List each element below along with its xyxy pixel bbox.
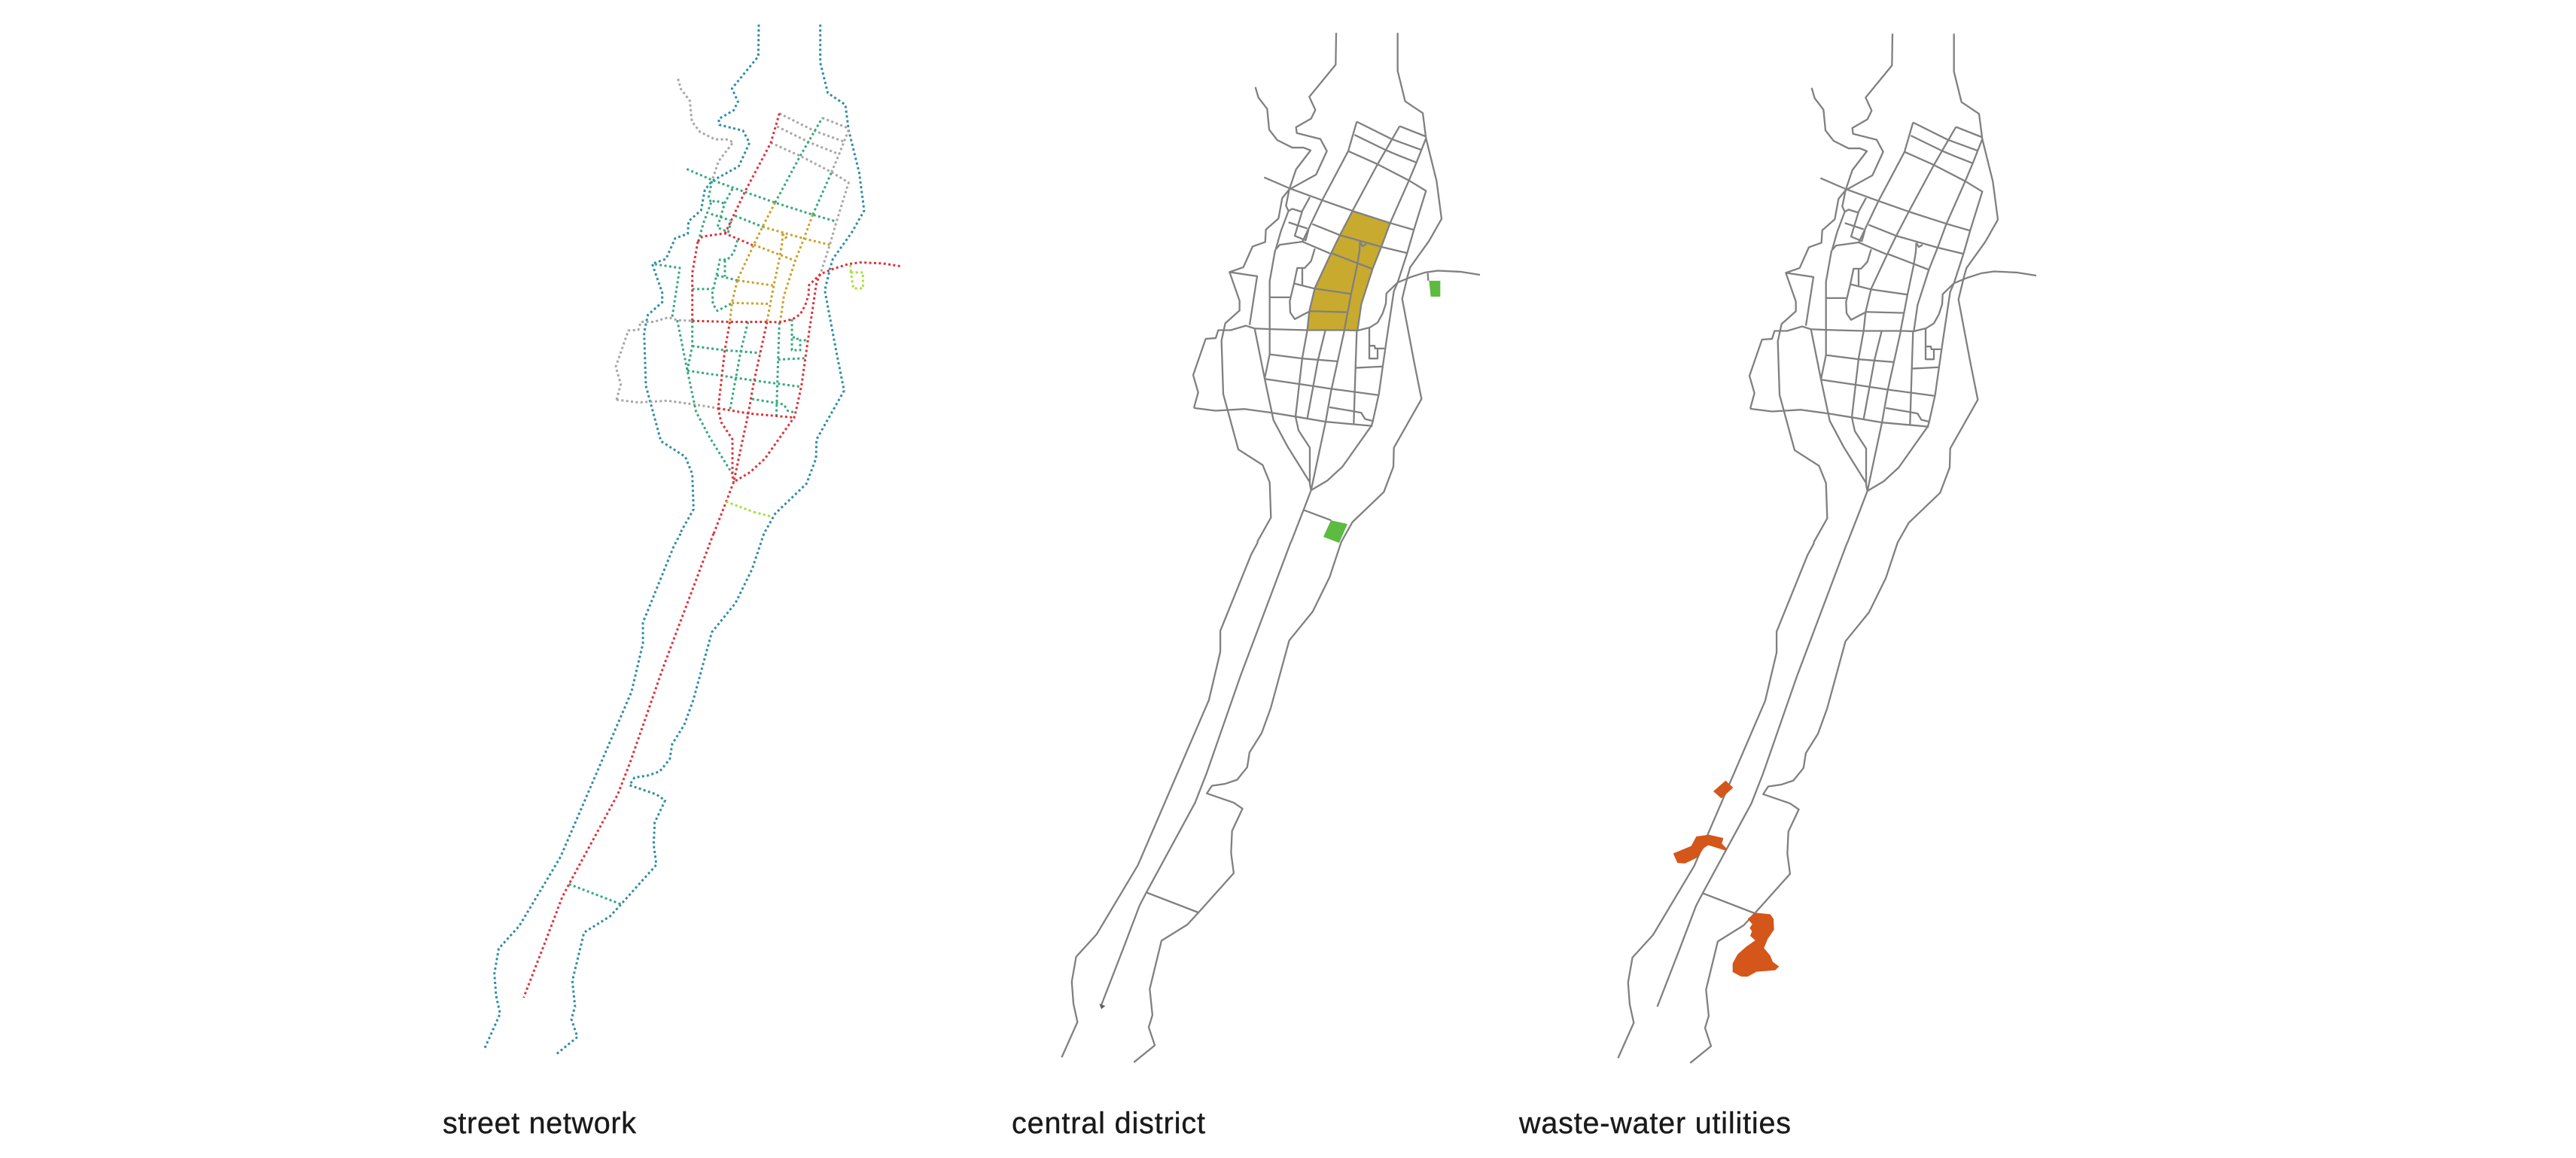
road network	[1061, 33, 1480, 1062]
site: middle parcel	[1673, 835, 1727, 864]
waste-water utility sites	[1673, 781, 1779, 977]
caption: central district: central district	[1012, 1107, 1205, 1140]
green space: east square	[1429, 281, 1440, 297]
site: small north parcel	[1713, 781, 1733, 798]
road end marker	[1099, 1004, 1105, 1009]
panel: central district map	[1061, 33, 1480, 1062]
main streets: red dotted	[524, 114, 903, 998]
caption: waste-water utilities: waste-water utilities	[1518, 1107, 1791, 1140]
panel: street network map	[484, 25, 903, 1054]
panel: waste-water utilities map	[1618, 34, 2036, 1063]
access streets: lime dotted	[726, 265, 863, 517]
local streets: green dotted	[569, 118, 836, 904]
green space: south square	[1323, 520, 1347, 543]
site: large south parcel	[1733, 913, 1779, 977]
central district area	[1308, 212, 1390, 331]
road network	[1618, 34, 2036, 1063]
caption: street network: street network	[443, 1107, 636, 1140]
arterial roads: blue dotted	[484, 25, 864, 1054]
central streets: gold dotted	[730, 203, 830, 322]
local streets: gray dotted	[616, 79, 848, 408]
